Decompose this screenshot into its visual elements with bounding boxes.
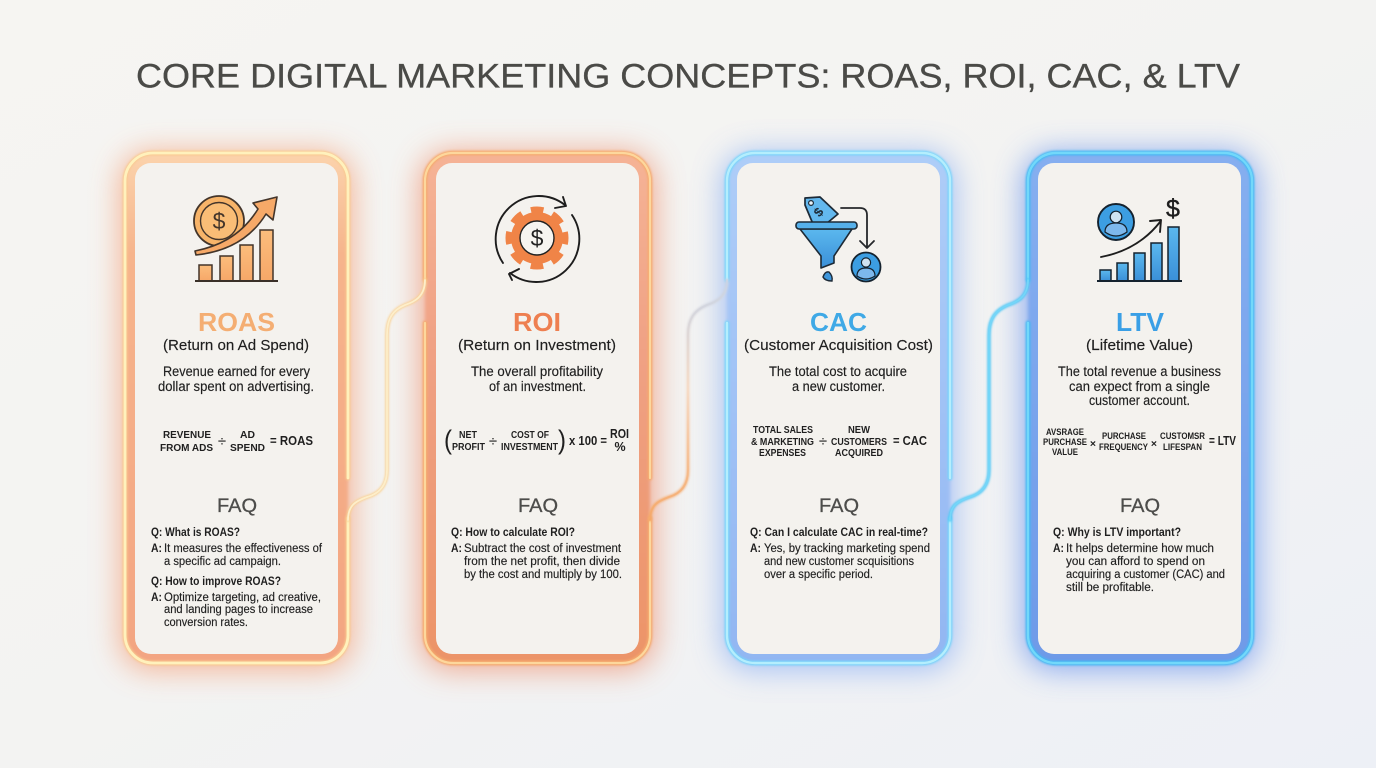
panel: LTV — [1023, 152, 1257, 670]
formula: FREQUENCY — [1099, 442, 1149, 453]
formula: TOTAL SALES — [753, 424, 813, 436]
formula: × — [1151, 438, 1157, 450]
formula — [444, 425, 629, 455]
FAQ content — [1053, 527, 1225, 594]
panel: CAC — [722, 152, 955, 670]
FAQ content: A: — [451, 543, 462, 555]
subtitle: (Customer Acquisition Cost) — [744, 337, 933, 354]
heading: ROAS: ROAS — [198, 307, 275, 337]
FAQ content: Q: Why is LTV important? — [1053, 527, 1181, 539]
formula: SPEND — [230, 442, 265, 454]
panel: ROAS — [120, 152, 353, 670]
FAQ content: Yes, by tracking marketing spend — [764, 543, 930, 555]
formula: ÷ — [489, 433, 497, 450]
formula: INVESTMENT — [501, 441, 558, 453]
description — [1058, 364, 1221, 408]
formula: LIFESPAN — [1163, 442, 1202, 453]
formula: ( — [444, 425, 452, 455]
FAQ content: by the cost and multiply by 100. — [464, 569, 622, 581]
formula: VALUE — [1052, 447, 1078, 458]
FAQ content: Q: What is ROAS? — [151, 527, 240, 539]
FAQ content — [451, 527, 622, 581]
description: The overall profitability — [471, 364, 603, 379]
icon: gear with circular arrows — [496, 196, 579, 282]
title: CORE DIGITAL MARKETING CONCEPTS: ROAS, ROI, CAC, & LTV — [136, 58, 1240, 96]
connector: CAC to LTV — [950, 280, 1028, 520]
description: The total revenue a business — [1058, 364, 1221, 379]
FAQ content: you can afford to spend on — [1066, 556, 1205, 568]
FAQ content: A: — [151, 592, 162, 604]
formula: ÷ — [819, 433, 827, 450]
formula: REVENUE — [163, 429, 211, 441]
description: of an investment. — [489, 379, 586, 394]
formula: & MARKETING — [751, 436, 814, 448]
formula: PROFIT — [452, 441, 486, 453]
formula: ÷ — [218, 433, 226, 450]
description: Revenue earned for every — [163, 364, 310, 379]
formula: = LTV — [1209, 434, 1237, 448]
formula: PURCHASE — [1102, 431, 1146, 442]
FAQ content: It measures the effectiveness of — [164, 543, 323, 555]
icon: customer, rising bars and dollar: $ — [1166, 195, 1180, 223]
formula: COST OF — [511, 429, 549, 441]
icon: customer, rising bars and dollar — [1097, 195, 1182, 281]
FAQ content: Q: Can I calculate CAC in real-time? — [750, 527, 928, 539]
formula: AVSRAGE — [1046, 427, 1084, 438]
formula: CUSTOMERS — [831, 436, 887, 448]
FAQ content: A: — [151, 543, 162, 555]
FAQ heading: FAQ — [819, 496, 859, 517]
FAQ content: and landing pages to increase — [164, 604, 313, 616]
formula: ACQUIRED — [835, 447, 883, 459]
icon: coin, growth arrow and bars — [194, 196, 278, 281]
formula: AD — [240, 429, 255, 441]
formula — [751, 424, 927, 459]
heading: ROI: ROI — [513, 307, 561, 337]
FAQ content — [750, 527, 930, 581]
FAQ content: from the net profit, then divide — [464, 556, 620, 568]
heading: LTV: LTV — [1116, 307, 1165, 337]
formula — [160, 429, 313, 454]
FAQ content: A: — [1053, 543, 1064, 555]
icon: price tag, funnel and customer — [796, 197, 880, 282]
FAQ content: acquiring a customer (CAC) and — [1066, 569, 1225, 581]
formula: CUSTOMSR — [1160, 431, 1205, 442]
subtitle: (Lifetime Value) — [1086, 337, 1193, 354]
FAQ content — [151, 527, 323, 629]
FAQ content: Subtract the cost of investment — [464, 543, 622, 555]
connector: ROAS to ROI — [348, 280, 425, 520]
formula: = ROAS — [270, 434, 313, 448]
description: a new customer. — [792, 379, 885, 394]
panel: ROI — [420, 152, 655, 670]
formula: NEW — [848, 424, 870, 436]
formula — [1043, 427, 1237, 458]
formula: = CAC — [893, 434, 927, 448]
FAQ heading: FAQ — [518, 496, 558, 517]
description: can expect from a single — [1069, 379, 1210, 394]
formula: ) — [558, 425, 566, 455]
subtitle: (Return on Investment) — [458, 337, 616, 354]
icon: coin, growth arrow and bars: $ — [213, 208, 226, 234]
FAQ content: A: — [750, 543, 761, 555]
FAQ heading: FAQ — [217, 496, 257, 517]
icon: gear with circular arrows: $ — [531, 225, 544, 251]
formula: ROI — [610, 427, 629, 441]
subtitle: (Return on Ad Spend) — [163, 337, 309, 354]
formula: PURCHASE — [1043, 437, 1087, 448]
description — [769, 364, 907, 394]
FAQ content: over a specific period. — [764, 569, 873, 581]
description: customer account. — [1089, 393, 1190, 408]
description: The total cost to acquire — [769, 364, 907, 379]
heading: CAC: CAC — [810, 307, 867, 337]
description — [158, 364, 314, 394]
formula: NET — [459, 429, 478, 441]
connector: ROI to CAC — [650, 280, 727, 520]
FAQ content: Q: How to calculate ROI? — [451, 527, 575, 539]
formula: EXPENSES — [759, 447, 806, 459]
formula: FROM ADS — [160, 442, 213, 454]
FAQ content: conversion rates. — [164, 617, 248, 629]
FAQ content: and new customer scquisitions — [764, 556, 914, 568]
formula: % — [614, 440, 626, 454]
FAQ content: still be profitable. — [1066, 582, 1154, 594]
FAQ content: Q: How to improve ROAS? — [151, 576, 281, 588]
FAQ heading: FAQ — [1120, 496, 1160, 517]
FAQ content: It helps determine how much — [1066, 543, 1214, 555]
description — [471, 364, 603, 394]
FAQ content: Optimize targeting, ad creative, — [164, 592, 321, 604]
icon: price tag, funnel and customer: $ — [810, 204, 827, 220]
formula: x 100 = — [569, 434, 607, 448]
FAQ content: a specific ad campaign. — [164, 556, 281, 568]
description: dollar spent on advertising. — [158, 379, 314, 394]
formula: × — [1090, 438, 1096, 450]
